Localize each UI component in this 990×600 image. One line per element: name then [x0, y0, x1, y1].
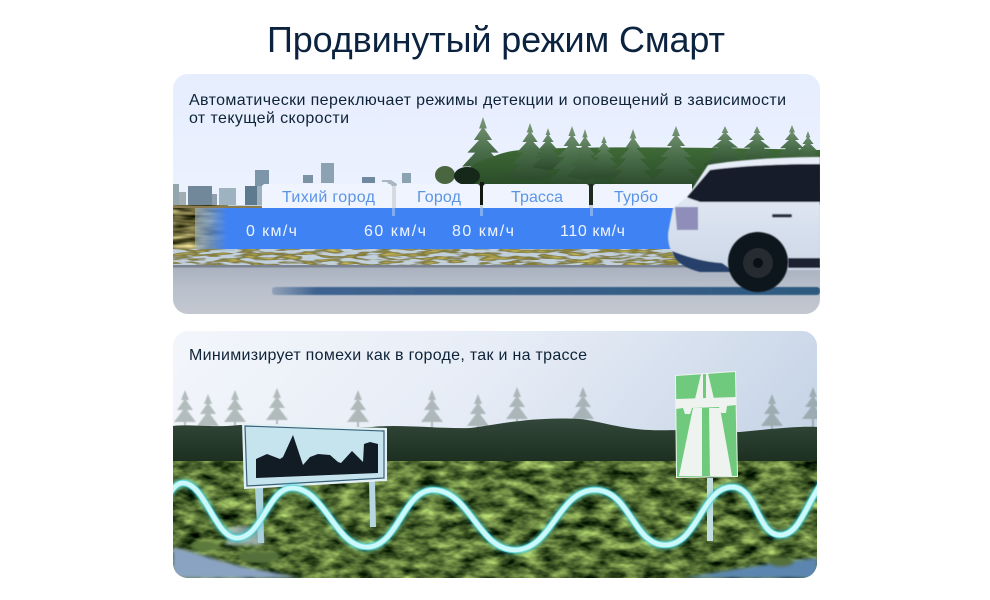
grass strip — [173, 205, 820, 265]
forest — [435, 117, 824, 210]
city silhouette — [256, 435, 378, 478]
tab: Трасса: Трасса — [511, 189, 563, 206]
road — [173, 265, 820, 314]
shrubs field — [173, 461, 817, 578]
ground patches — [173, 526, 817, 578]
city sign — [242, 423, 387, 543]
tab: Трасса — [483, 184, 589, 208]
description text: Автоматически переключает режимы детекции и оповещений в зависимости — [189, 92, 786, 109]
tab: Город: Город — [417, 189, 462, 206]
panel: interference — [165, 331, 825, 578]
speed labels: 80 км/ч — [452, 223, 514, 240]
description text: от текущей скорости — [189, 110, 349, 127]
description text: Минимизирует помехи как в городе, так и на трассе — [189, 347, 587, 364]
tab: Тихий город: Тихий город — [282, 189, 376, 206]
sign posts — [255, 488, 264, 543]
speed labels: 0 км/ч — [246, 223, 297, 240]
title: Продвинутый режим Смарт — [267, 19, 725, 60]
signal wave — [165, 478, 825, 550]
speed bar — [195, 208, 695, 249]
city skyline — [173, 163, 411, 206]
tab: Турбо — [593, 184, 692, 208]
tab: Турбо: Турбо — [614, 189, 658, 206]
tab: Тихий город — [262, 184, 392, 208]
tab: Город — [396, 184, 480, 208]
sky — [173, 331, 817, 578]
background trees — [173, 387, 824, 464]
speed labels — [246, 224, 624, 236]
speed labels: 110 км/ч — [560, 223, 625, 240]
description text — [189, 92, 786, 127]
sky — [173, 74, 820, 205]
bar ticks — [392, 208, 593, 216]
speed labels: 60 км/ч — [364, 223, 426, 240]
panel: speed modes — [173, 74, 824, 314]
car — [668, 157, 820, 292]
highway sign — [675, 371, 738, 541]
sign plate — [675, 371, 738, 478]
sign post — [707, 478, 713, 541]
street lamp — [382, 180, 397, 209]
sign plate — [242, 423, 387, 489]
